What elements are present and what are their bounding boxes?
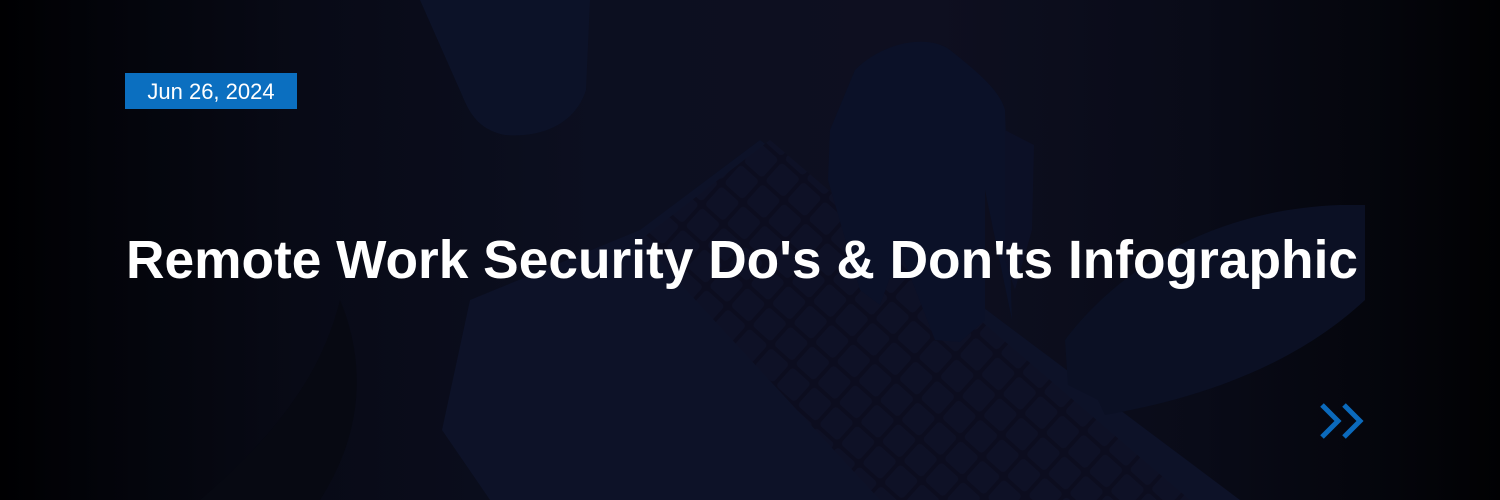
keyboard xyxy=(640,140,1190,500)
date badge: Jun 26, 2024 xyxy=(147,79,275,104)
icon: double chevron arrow xyxy=(1320,403,1364,439)
date badge xyxy=(125,73,297,109)
hand: right xyxy=(1065,205,1365,415)
hand: sleeve top xyxy=(420,0,590,135)
left edge shape xyxy=(200,300,357,500)
laptop body xyxy=(442,140,1240,500)
title: Remote Work Security Do's & Don'ts Infographic xyxy=(126,230,1358,290)
hand: centre fingers xyxy=(828,42,1012,342)
hand: thumb xyxy=(1005,130,1034,290)
